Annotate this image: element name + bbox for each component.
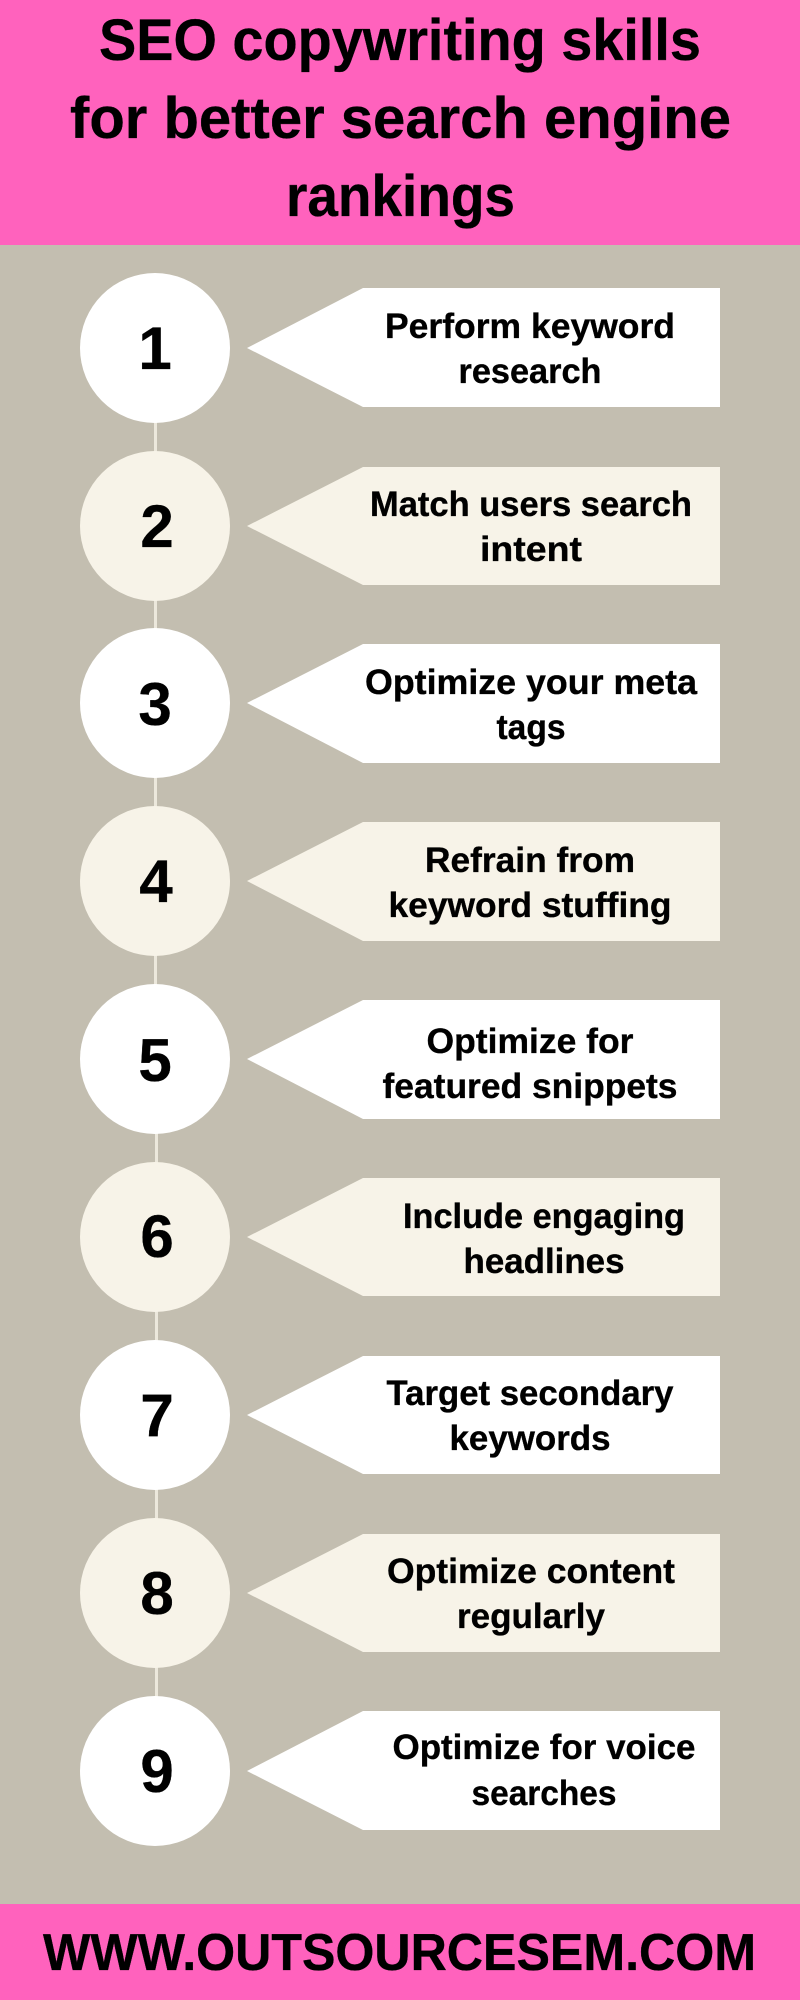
step 9 bbox=[80, 1696, 720, 1846]
step 7: keywords bbox=[450, 1419, 610, 1458]
step 6 bbox=[80, 1162, 720, 1312]
step 3: tags bbox=[496, 708, 566, 747]
step 2: intent bbox=[480, 530, 582, 569]
footer website address: WWW.OUTSOURCESEM.COM bbox=[43, 1924, 756, 1982]
step 9: searches bbox=[472, 1774, 616, 1813]
step 8: regularly bbox=[457, 1597, 606, 1636]
step 3: Optimize your meta bbox=[365, 663, 698, 702]
title: SEO copywriting skills bbox=[99, 8, 701, 73]
step 7: Target secondary bbox=[386, 1374, 674, 1413]
step 4: keyword stuffing bbox=[388, 886, 672, 925]
step 2: 2 bbox=[140, 493, 174, 560]
step 1 bbox=[80, 273, 720, 423]
step 5: 5 bbox=[138, 1027, 172, 1094]
step 2: Match users search bbox=[370, 485, 692, 524]
step 4: 4 bbox=[139, 848, 173, 915]
title: rankings bbox=[286, 164, 515, 229]
step 8: 8 bbox=[140, 1560, 174, 1627]
footer band bbox=[0, 1904, 800, 2000]
step 5: Optimize for bbox=[426, 1022, 634, 1061]
step 9: Optimize for voice bbox=[392, 1728, 696, 1767]
step 8: Optimize content bbox=[387, 1552, 675, 1591]
step 3 bbox=[80, 628, 720, 778]
title: for better search engine bbox=[70, 86, 731, 151]
step 2 bbox=[80, 451, 720, 601]
step 7 bbox=[80, 1340, 720, 1490]
step 9: 9 bbox=[140, 1738, 174, 1805]
step 1: research bbox=[458, 352, 602, 391]
header band bbox=[0, 0, 800, 245]
step 4: Refrain from bbox=[425, 841, 635, 880]
step 1: Perform keyword bbox=[385, 307, 675, 346]
step 5: featured snippets bbox=[382, 1067, 678, 1106]
step 8 bbox=[80, 1518, 720, 1668]
timeline connectors bbox=[154, 420, 158, 1700]
step 6: 6 bbox=[140, 1203, 174, 1270]
step 6: headlines bbox=[464, 1242, 624, 1281]
step 1: 1 bbox=[138, 315, 172, 382]
step 5 bbox=[80, 984, 720, 1134]
title bbox=[70, 8, 731, 229]
step 6: Include engaging bbox=[403, 1197, 685, 1236]
step 4 bbox=[80, 806, 720, 956]
step 7: 7 bbox=[140, 1382, 174, 1449]
step 3: 3 bbox=[138, 671, 172, 738]
